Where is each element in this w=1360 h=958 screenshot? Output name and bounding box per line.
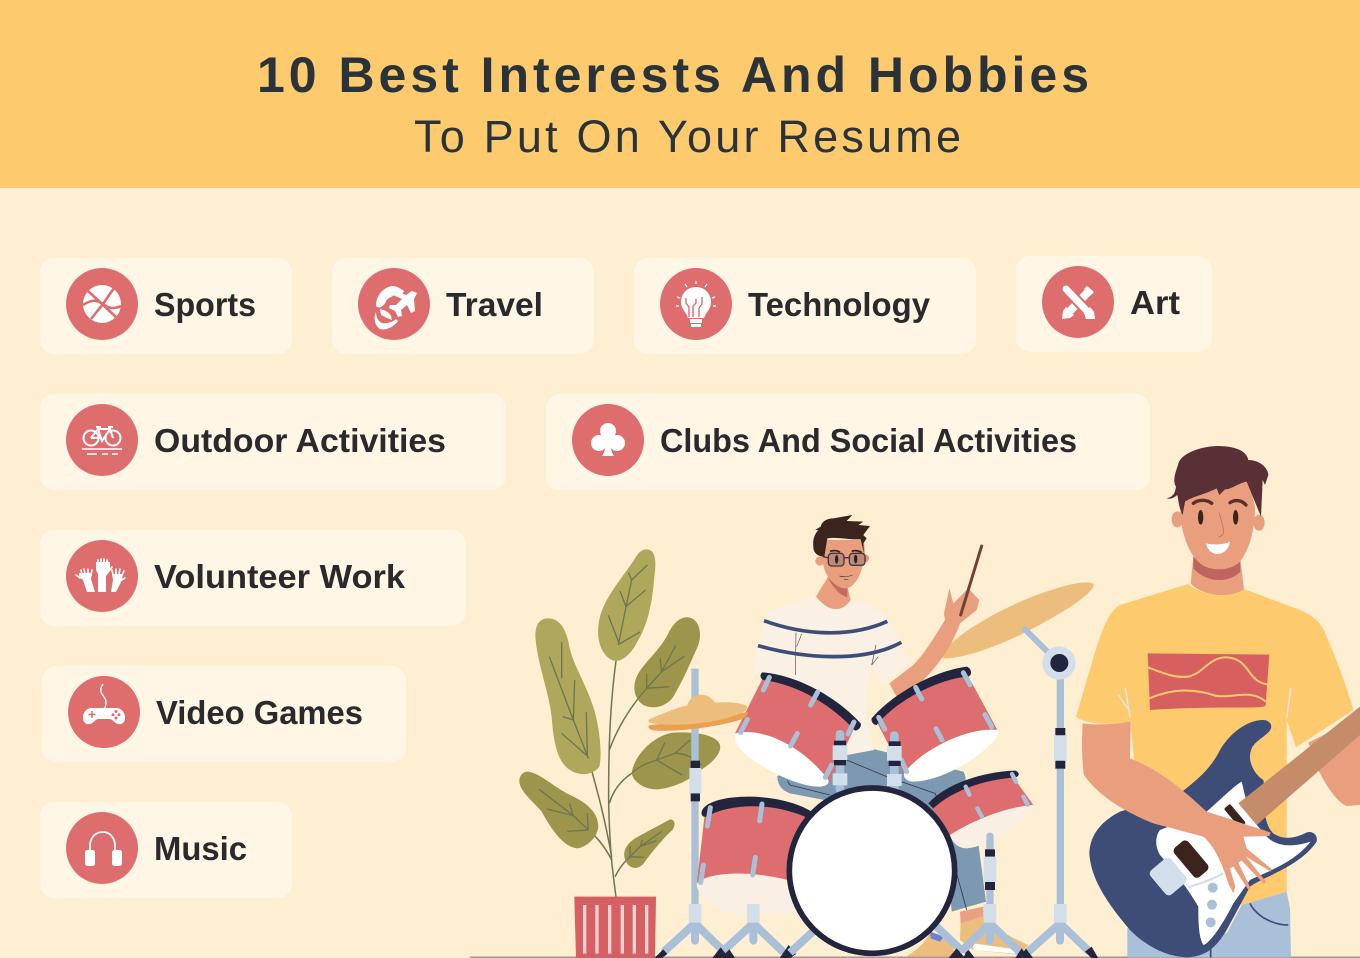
drummer: shirt xyxy=(753,597,912,755)
left top tom drum xyxy=(735,672,861,787)
guitarist: jeans xyxy=(1127,892,1291,957)
card: Travel xyxy=(332,258,594,354)
guitarist: head xyxy=(1167,446,1268,595)
icon: game controller xyxy=(83,684,125,724)
card: Sports xyxy=(40,258,292,354)
plant pot xyxy=(574,897,656,958)
ground line xyxy=(470,956,1360,958)
label: Clubs And Social Activities: Clubs And Social Activities xyxy=(660,422,1077,459)
label: Art: Art xyxy=(1130,284,1180,321)
label: Outdoor Activities: Outdoor Activities xyxy=(154,422,446,459)
label: Travel: Travel xyxy=(446,286,543,323)
hi-hat cymbals and clamps xyxy=(648,695,760,923)
card: Music xyxy=(40,802,292,898)
guitarist: left arm and hand xyxy=(1082,722,1272,893)
drummer: shoes xyxy=(790,907,1028,958)
illustration: drummer and drum kit xyxy=(648,515,1098,958)
hi-hat stand and small stands xyxy=(654,669,796,958)
card: Technology xyxy=(634,258,976,354)
label: Technology: Technology xyxy=(748,286,931,323)
icon: club suit xyxy=(591,423,625,456)
illustration: guitarist xyxy=(1076,446,1360,957)
icon: circuit light bulb xyxy=(676,281,716,327)
card: Video Games xyxy=(42,666,406,762)
label: Volunteer Work: Volunteer Work xyxy=(154,558,406,595)
label: Music: Music xyxy=(154,830,247,867)
guitarist: shirt xyxy=(1076,584,1353,905)
icon: basketball xyxy=(83,285,121,323)
tom mounts xyxy=(833,730,902,795)
label: Sports: Sports xyxy=(154,286,256,323)
right floor tom drum xyxy=(928,771,1033,958)
card: Outdoor Activities xyxy=(40,394,506,490)
bass drum xyxy=(789,788,955,953)
icon: globe and plane xyxy=(375,286,417,330)
icon: raised hands xyxy=(76,559,125,592)
card: Art xyxy=(1016,256,1212,352)
card: Clubs And Social Activities xyxy=(546,394,1150,490)
right cymbal and stand xyxy=(941,582,1098,958)
subtitle: To Put On Your Resume xyxy=(414,111,961,162)
icon: bicycle xyxy=(82,427,122,454)
drummer: trousers xyxy=(777,749,986,912)
card: Volunteer Work xyxy=(40,530,466,626)
header band xyxy=(0,0,1360,188)
label: Video Games: Video Games xyxy=(156,694,363,731)
guitarist: right arm xyxy=(1308,733,1360,806)
drummer: head and glasses xyxy=(813,515,870,609)
drummer: raised arm and drumstick xyxy=(889,546,982,697)
icon: crossed pencil and brush xyxy=(1062,286,1095,319)
guitar xyxy=(1089,707,1360,957)
icon: headphones xyxy=(85,832,122,866)
illustration: potted plant xyxy=(519,549,720,958)
floor tom drum xyxy=(697,797,812,914)
right top tom drum xyxy=(872,667,999,782)
title: 10 Best Interests And Hobbies xyxy=(257,47,1089,103)
